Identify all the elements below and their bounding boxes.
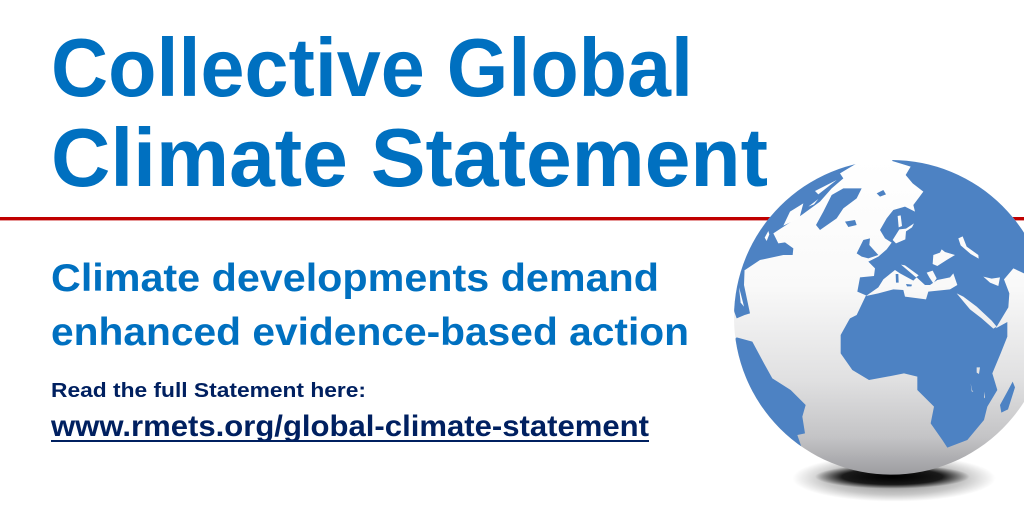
statement link: www.rmets.org/global-climate-statement [50, 410, 649, 443]
Red Sea [957, 293, 997, 329]
Persian Gulf [983, 277, 1000, 286]
Madagascar [1000, 382, 1015, 413]
subtitle: Climate developments demand [51, 257, 659, 300]
Central America coast [734, 270, 750, 318]
Gulf of Bothnia [898, 215, 902, 227]
Arctic channels [765, 180, 837, 241]
Adriatic Sea [901, 265, 919, 277]
title: Climate Statement [51, 111, 768, 204]
Aegean Sea [927, 271, 937, 283]
title: Collective Global [51, 21, 693, 114]
globe sphere [734, 160, 1024, 475]
United Kingdom and Ireland [857, 238, 878, 258]
red divider line [0, 217, 1024, 220]
subtitle [51, 257, 689, 354]
subtitle: enhanced evidence-based action [51, 311, 689, 354]
Greenland [816, 188, 862, 230]
Canada and Arctic [741, 164, 856, 270]
title [51, 21, 768, 204]
continents [734, 160, 1024, 448]
Eurasia and Africa [840, 160, 1024, 448]
Mediterranean Sea [866, 270, 957, 299]
East African lakes [971, 367, 985, 398]
Iceland [845, 220, 857, 227]
Black Sea [933, 249, 955, 266]
main landmass [840, 160, 1024, 448]
South America [736, 337, 806, 446]
Baja California streak [739, 287, 744, 307]
Hudson Bay [783, 203, 803, 226]
Mediterranean islands [896, 274, 912, 286]
North Atlantic lands [741, 164, 886, 270]
read the statement prompt: Read the full Statement here: [51, 380, 366, 402]
Baltic Sea [893, 223, 914, 243]
icon: globe [734, 160, 1024, 500]
Caspian Sea [958, 236, 979, 259]
Svalbard [877, 190, 886, 197]
globe shadow [792, 455, 996, 502]
